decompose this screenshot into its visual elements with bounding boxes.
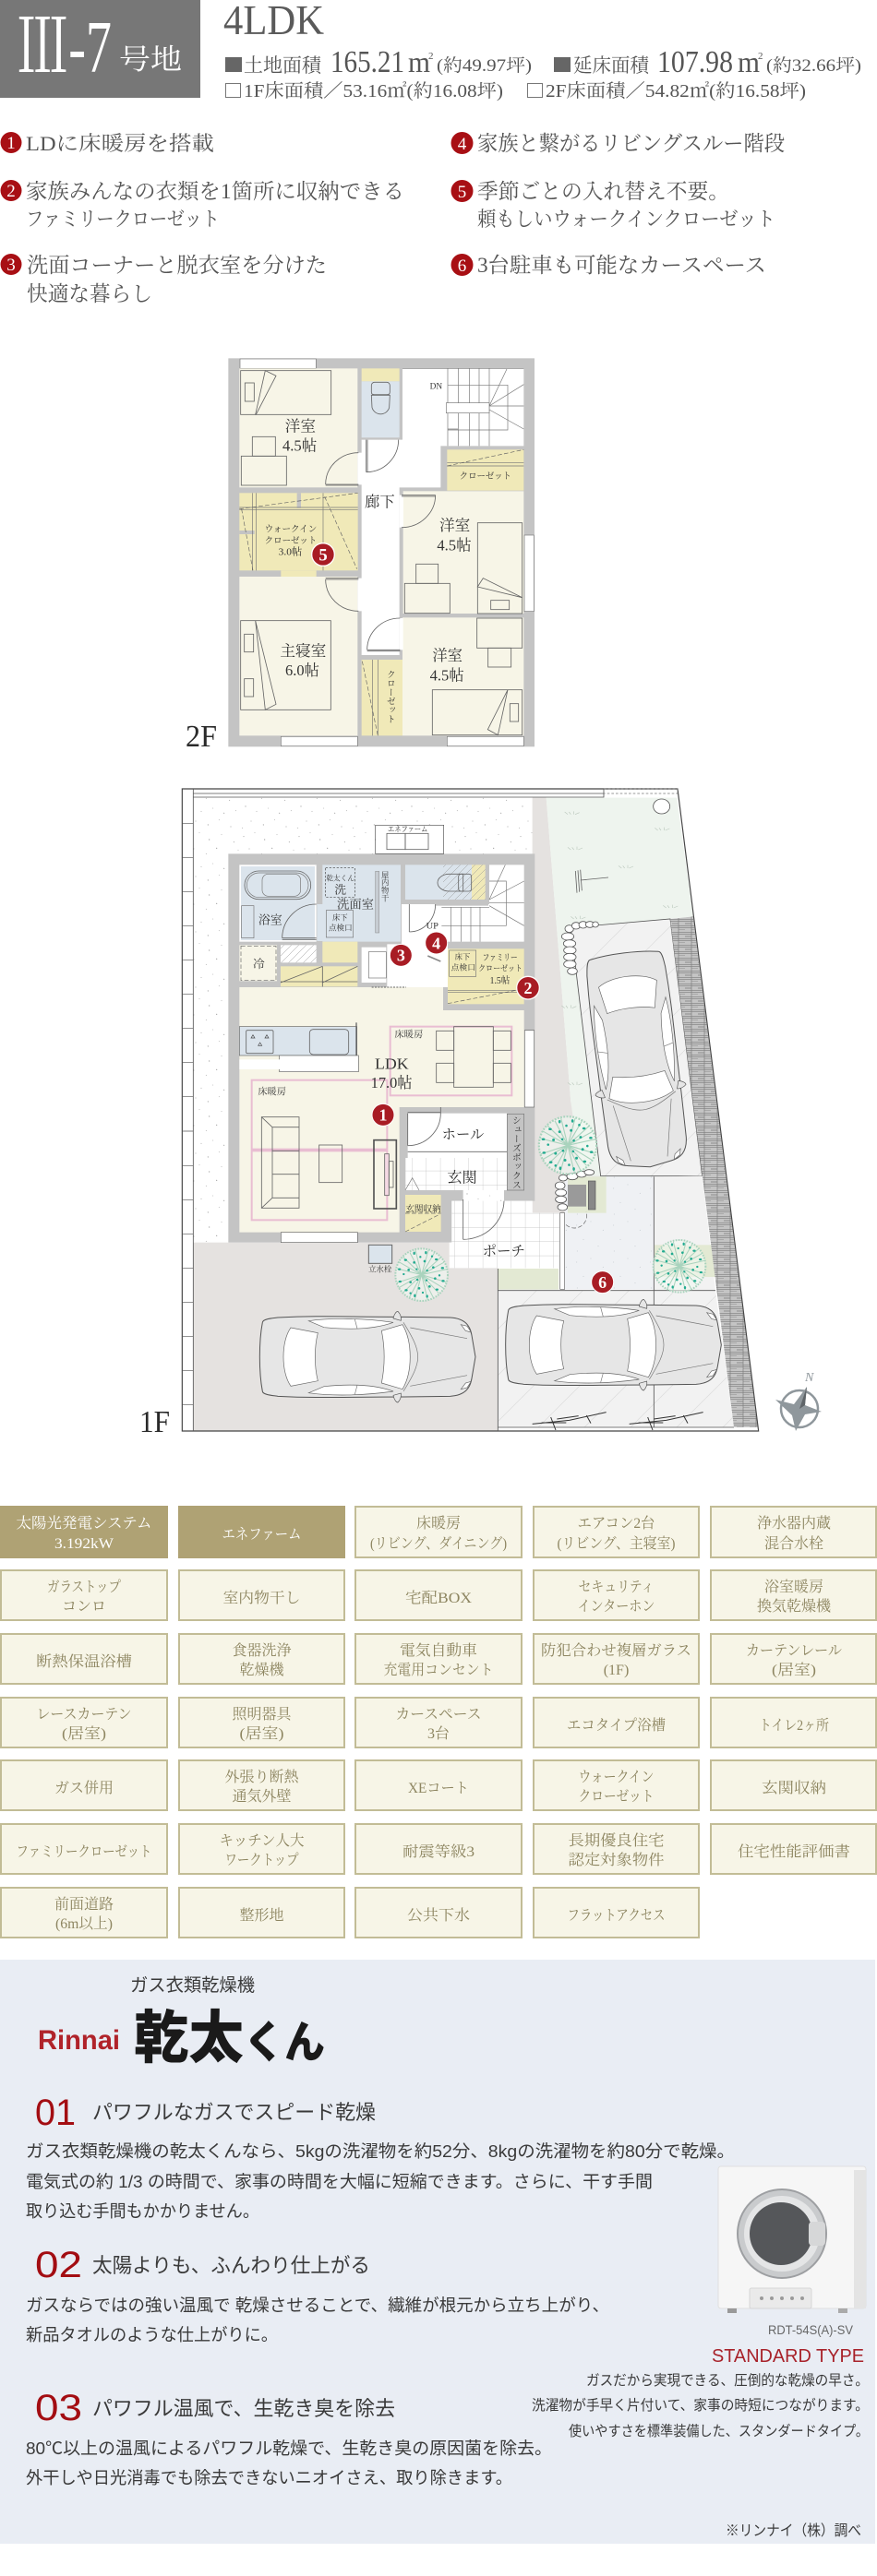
point 02 bbox=[26, 2245, 609, 2344]
point 01: 01 bbox=[35, 2093, 76, 2133]
row 1: エアコン2台 bbox=[578, 1515, 655, 1532]
row 7: フラットアクセス bbox=[567, 1908, 665, 1924]
stair and hall 1F bbox=[387, 865, 524, 987]
row 3: (1F) bbox=[604, 1663, 629, 1678]
room labels 2F: 主寝室 bbox=[280, 641, 326, 660]
feature 4: 家族と繋がるリビングスルー階段 bbox=[477, 132, 785, 155]
point 01: 電気式の約 1/3 の時間で、家事の時間を大幅に短縮できます。さらに、干す手間 bbox=[26, 2172, 653, 2191]
row 6: ワークトップ bbox=[225, 1852, 299, 1868]
building walls 1F bbox=[228, 853, 535, 1243]
room labels 2F: 洋室 bbox=[432, 647, 463, 664]
row 5: クローゼット bbox=[578, 1789, 654, 1805]
room labels 2F: 洋室 bbox=[285, 418, 316, 435]
standard type callout bbox=[532, 2346, 869, 2439]
area figures: 2 bbox=[428, 51, 434, 62]
feature 2 bbox=[0, 180, 404, 231]
area figures: 165.21 bbox=[330, 45, 404, 79]
row 6: ファミリークローゼット bbox=[17, 1844, 151, 1860]
row 6: 長期優良住宅 bbox=[569, 1832, 665, 1849]
1F label: 1F bbox=[139, 1405, 170, 1439]
family closet bbox=[448, 948, 524, 1004]
row 4: (居室) bbox=[62, 1725, 106, 1742]
product name: 乾太 bbox=[134, 2007, 244, 2070]
row 7 bbox=[1, 1888, 699, 1938]
marker 5 bbox=[312, 543, 334, 566]
point 03: 80℃以上の温風によるパワフル乾燥で、生乾き臭の原因菌を除去。 bbox=[26, 2439, 552, 2458]
floor heating zones bbox=[252, 1027, 511, 1220]
feature 2: 家族みんなの衣類を1箇所に収納できる bbox=[26, 180, 404, 203]
right parking upper bbox=[571, 919, 703, 1176]
room labels 1F: 洗面室 bbox=[337, 898, 374, 912]
planting patches bbox=[498, 1176, 715, 1290]
feature 1: LDに床暖房を搭載 bbox=[26, 132, 214, 155]
room labels 2F: ウォークイン bbox=[265, 525, 317, 535]
row 3: 乾燥機 bbox=[239, 1662, 284, 1678]
point 03: 03 bbox=[35, 2388, 82, 2428]
row 1: 3.192kW bbox=[54, 1536, 114, 1552]
row 4: エコタイプ浴槽 bbox=[567, 1717, 666, 1734]
row 1: (リビング、主寝室) bbox=[558, 1534, 676, 1552]
row 3: 食器洗浄 bbox=[232, 1642, 292, 1659]
gate post bbox=[562, 1181, 595, 1228]
row 2: 浴室暖房 bbox=[764, 1579, 823, 1595]
row 3: (居室) bbox=[772, 1662, 816, 1678]
row 1 bbox=[1, 1507, 876, 1557]
row 5: ガス併用 bbox=[54, 1780, 114, 1796]
area figures: (約32.66坪) bbox=[766, 55, 861, 76]
point 02: 太陽よりも、ふんわり仕上がる bbox=[92, 2254, 370, 2277]
lawn tufts bbox=[561, 811, 678, 1085]
lot number badge bbox=[0, 0, 200, 98]
row 3: 断熱保温浴槽 bbox=[36, 1653, 132, 1670]
dryer panel bbox=[0, 1960, 875, 2544]
room labels 1F: ポーチ bbox=[483, 1244, 525, 1259]
plan markers 1F: 4 bbox=[432, 934, 440, 952]
room labels 1F: 洗 bbox=[334, 883, 346, 897]
dining set bbox=[437, 1027, 511, 1087]
row 2: インターホン bbox=[578, 1598, 655, 1615]
standard type callout: ガスだから実現できる、圧倒的な乾燥の早さ。 bbox=[586, 2373, 869, 2389]
site lines bbox=[182, 789, 759, 1431]
toilet room 2F bbox=[362, 381, 400, 437]
feature 5: 頼もしいウォークインクローゼット bbox=[477, 208, 775, 231]
room labels 1F: 17.0帖 bbox=[371, 1074, 413, 1091]
corridor and stair bbox=[362, 368, 523, 655]
product name bbox=[134, 2007, 325, 2070]
feature 6: 3台駐車も可能なカースペース bbox=[477, 254, 766, 277]
feature 2: ファミリークローゼット bbox=[26, 208, 220, 231]
point 01: 取り込む手間もかかりません。 bbox=[26, 2201, 259, 2221]
south window 1F bbox=[281, 1233, 357, 1243]
feature 3: 3 bbox=[6, 256, 16, 275]
room labels 1F: 床暖房 bbox=[258, 1086, 286, 1098]
room labels 1F bbox=[253, 871, 525, 1259]
feature 5: 5 bbox=[458, 183, 466, 202]
standard type callout: 洗濯物が手早く片付いて、家事の時短につながります。 bbox=[532, 2398, 869, 2414]
plan markers 1F: 1 bbox=[378, 1106, 387, 1125]
bath bbox=[239, 865, 317, 942]
row 2: コンロ bbox=[62, 1599, 106, 1615]
lawn bbox=[547, 798, 693, 1176]
2F floor plan bbox=[228, 358, 535, 746]
row 5: XEコート bbox=[408, 1781, 469, 1796]
row 5: 玄関収納 bbox=[762, 1780, 826, 1796]
row 2: 宅配BOX bbox=[405, 1590, 472, 1606]
washroom bbox=[317, 865, 401, 942]
area figures: m bbox=[408, 45, 430, 78]
compass bbox=[775, 1371, 822, 1431]
porch bbox=[450, 1199, 559, 1268]
room labels 2F bbox=[265, 383, 511, 723]
car: side parking bbox=[579, 948, 695, 1173]
room labels 1F: シューズボックス bbox=[511, 1115, 522, 1189]
room labels 1F: ファミリー bbox=[483, 953, 518, 963]
row 3: カーテンレール bbox=[746, 1643, 842, 1659]
stair 2F bbox=[402, 368, 523, 446]
living set bbox=[261, 1117, 396, 1209]
point 02: 新品タオルのような仕上がりに。 bbox=[26, 2325, 278, 2344]
bicycles bbox=[533, 1413, 703, 1430]
car: front parking bbox=[506, 1299, 721, 1390]
closets 2F bbox=[239, 368, 523, 735]
room labels 2F: 4.5帖 bbox=[282, 436, 317, 454]
row 2: セキュリティ bbox=[578, 1580, 654, 1595]
tree near carport bbox=[395, 1248, 448, 1301]
stub walls 2F bbox=[239, 493, 301, 534]
row 2: 室内物干し bbox=[223, 1590, 301, 1606]
feature 5 bbox=[451, 180, 775, 231]
row 1: 浄水器内蔵 bbox=[757, 1515, 831, 1532]
room labels 2F: 洋室 bbox=[439, 517, 470, 534]
area figures bbox=[225, 45, 861, 101]
product name: くん bbox=[244, 2019, 325, 2068]
row 5 bbox=[1, 1760, 876, 1810]
point 01: パワフルなガスでスピード乾燥 bbox=[92, 2101, 376, 2124]
row 4 bbox=[1, 1698, 876, 1747]
room labels 1F: 浴室 bbox=[258, 913, 282, 927]
room labels 1F: 屋内物干 bbox=[380, 871, 389, 902]
plan markers 1F: 2 bbox=[523, 979, 532, 997]
plan markers 1F: 6 bbox=[598, 1273, 607, 1292]
gravel yard bbox=[193, 797, 534, 1243]
area figures: m bbox=[738, 45, 760, 78]
row 2 bbox=[1, 1570, 876, 1620]
front parking bbox=[498, 1176, 734, 1427]
room labels 1F: 点検口 bbox=[329, 922, 353, 932]
feature 3: 洗面コーナーと脱衣室を分けた bbox=[27, 254, 327, 277]
manhole and drying pole bbox=[575, 799, 670, 893]
source note: ※リンナイ（株）調べ bbox=[726, 2522, 861, 2539]
point 03: 外干しや日光消毒でも除去できないニオイさえ、取り除きます。 bbox=[26, 2468, 512, 2487]
feature 6: 6 bbox=[458, 256, 466, 276]
furniture 2F bbox=[241, 371, 523, 735]
feature 3: 快適な暮らし bbox=[27, 282, 152, 305]
row 7: (6m以上) bbox=[55, 1915, 113, 1932]
room labels 1F: 乾太くん bbox=[326, 873, 354, 882]
dryer product illustration bbox=[718, 2166, 866, 2313]
row 1: エネファーム bbox=[222, 1526, 301, 1543]
row 3: 電気自動車 bbox=[400, 1642, 477, 1659]
brick band bbox=[670, 916, 758, 1427]
room labels 1F: 床暖房 bbox=[394, 1028, 423, 1040]
paving square bbox=[565, 1176, 654, 1289]
area figures: 1F床面積／53.16㎡(約16.08坪) bbox=[244, 80, 503, 101]
model number: RDT-54S(A)-SV bbox=[768, 2322, 854, 2337]
tree in front planting bbox=[654, 1240, 705, 1293]
room labels 1F: 玄関収納 bbox=[405, 1203, 441, 1214]
room labels 1F: 床下 bbox=[332, 912, 348, 922]
kitchen bbox=[239, 1022, 358, 1072]
row 4: トイレ2ヶ所 bbox=[759, 1717, 829, 1734]
compass: N bbox=[804, 1371, 814, 1385]
room labels 2F: 廊下 bbox=[365, 493, 395, 510]
2F label: 2F bbox=[186, 720, 217, 754]
feature 5: 季節ごとの入れ替え不要。 bbox=[477, 180, 729, 203]
row 5: 外張り断熱 bbox=[225, 1769, 299, 1785]
room labels 1F: LDK bbox=[375, 1055, 409, 1072]
room labels 1F: 1.5帖 bbox=[490, 974, 510, 986]
LDK floor bbox=[239, 987, 524, 1233]
white strip by porch bbox=[560, 1213, 565, 1289]
side path and carport paving bbox=[193, 797, 601, 1431]
row 2: ガラストップ bbox=[47, 1579, 121, 1595]
room labels 2F: クローゼット bbox=[385, 670, 396, 723]
row 6: 認定対象物件 bbox=[569, 1852, 665, 1868]
point 03: パワフル温風で、生乾き臭を除去 bbox=[92, 2397, 395, 2420]
spec grid bbox=[1, 1507, 876, 1938]
panel background bbox=[0, 1960, 875, 2544]
point 02: ガスならではの強い温風で 乾燥させることで、繊維が根元から立ち上がり、 bbox=[26, 2296, 609, 2315]
row 1: 混合水栓 bbox=[764, 1535, 823, 1552]
lot number badge: 号地 bbox=[119, 43, 182, 76]
feature 3 bbox=[0, 254, 327, 305]
feature 1: 1 bbox=[6, 134, 16, 153]
fuel cell unit bbox=[376, 825, 444, 853]
area figures: 107.98 bbox=[657, 45, 733, 79]
plan markers 1F: 3 bbox=[397, 947, 405, 965]
lot number badge: Ⅲ-7 bbox=[17, 7, 112, 89]
doors 2F bbox=[326, 440, 436, 651]
entry hall bbox=[405, 1107, 524, 1232]
Rinnai logo: Rinnai bbox=[38, 2025, 120, 2056]
area figures: 2F床面積／54.82㎡(約16.58坪) bbox=[546, 80, 806, 101]
windows 2F bbox=[240, 359, 534, 746]
point 01: ガス衣類乾燥機の乾太くんなら、5kgの洗濯物を約52分、8kgの洗濯物を約80分で乾燥。 bbox=[26, 2141, 735, 2161]
product kicker: ガス衣類乾燥機 bbox=[130, 1975, 255, 1996]
row 6: 耐震等級3 bbox=[402, 1843, 475, 1860]
feature 2: 2 bbox=[6, 182, 16, 201]
walls 2F bbox=[228, 358, 535, 746]
row 6: 住宅性能評価書 bbox=[738, 1843, 850, 1860]
room labels 2F: DN bbox=[430, 383, 442, 392]
room labels 1F: 床下 bbox=[455, 952, 470, 961]
row 3 bbox=[1, 1634, 876, 1684]
water tap: 立水栓 bbox=[368, 1264, 392, 1273]
row 7: 前面道路 bbox=[54, 1896, 114, 1913]
closet fittings 2F bbox=[239, 449, 523, 735]
1F site plan bbox=[182, 789, 759, 1431]
storage 1F bbox=[239, 942, 406, 987]
row 4: レースカーテン bbox=[37, 1707, 131, 1723]
car: carport left bbox=[259, 1311, 475, 1402]
point 03 bbox=[26, 2388, 552, 2487]
room labels 1F: 玄関 bbox=[447, 1170, 477, 1187]
plan markers 1F bbox=[372, 932, 614, 1294]
row 1: 太陽光発電システム bbox=[17, 1515, 151, 1532]
room labels 2F: 3.0帖 bbox=[279, 546, 303, 558]
area figures: 土地面積 bbox=[244, 54, 323, 77]
room labels 1F: クローゼット bbox=[478, 964, 523, 973]
marker 5: 5 bbox=[318, 545, 328, 565]
window east 1F bbox=[524, 1031, 535, 1107]
room labels 2F: クローゼット bbox=[460, 471, 511, 482]
feature 4: 4 bbox=[458, 135, 467, 154]
row 1: (リビング、ダイニング) bbox=[370, 1535, 507, 1552]
room labels 1F: UP bbox=[426, 922, 438, 931]
stones bbox=[555, 922, 598, 1210]
room labels 1F: 点検口 bbox=[451, 962, 475, 972]
point 02: 02 bbox=[35, 2245, 82, 2285]
row 1: 床暖房 bbox=[416, 1515, 461, 1532]
row 5: 通気外壁 bbox=[232, 1788, 292, 1805]
room labels 1F: 冷 bbox=[253, 958, 265, 971]
room labels 1F: ホール bbox=[442, 1127, 484, 1142]
row 6 bbox=[1, 1824, 876, 1874]
row 7: 公共下水 bbox=[407, 1907, 470, 1924]
row 5: ウォークイン bbox=[578, 1770, 654, 1785]
row 3: 充電用コンセント bbox=[384, 1662, 493, 1678]
area figures: 延床面積 bbox=[573, 54, 651, 77]
room labels 2F: 4.5帖 bbox=[430, 666, 464, 684]
standard type callout: STANDARD TYPE bbox=[712, 2346, 864, 2367]
fuel cell unit: エネファーム bbox=[388, 826, 427, 834]
row 3: 防犯合わせ複層ガラス bbox=[541, 1641, 691, 1659]
feature list bbox=[0, 132, 785, 305]
row 4: 3台 bbox=[427, 1725, 450, 1742]
room labels 2F: 6.0帖 bbox=[285, 662, 319, 679]
tree near gate bbox=[539, 1116, 596, 1174]
area figures: 2 bbox=[758, 51, 763, 62]
row 4: 照明器具 bbox=[232, 1706, 292, 1723]
area figures: (約49.97坪) bbox=[437, 55, 532, 76]
room labels 2F: 4.5帖 bbox=[437, 537, 472, 555]
row 6: キッチン人大 bbox=[220, 1832, 305, 1849]
row 2: 換気乾燥機 bbox=[757, 1598, 832, 1615]
rooms 2F bbox=[239, 368, 523, 735]
row 7: 整形地 bbox=[239, 1906, 284, 1924]
point 01 bbox=[26, 2093, 735, 2221]
toilet room 1F bbox=[405, 865, 486, 900]
room labels 2F: クローゼット bbox=[265, 536, 317, 546]
row 4: (居室) bbox=[240, 1725, 284, 1742]
row 4: カースペース bbox=[395, 1707, 482, 1723]
water tap bbox=[368, 1245, 392, 1273]
